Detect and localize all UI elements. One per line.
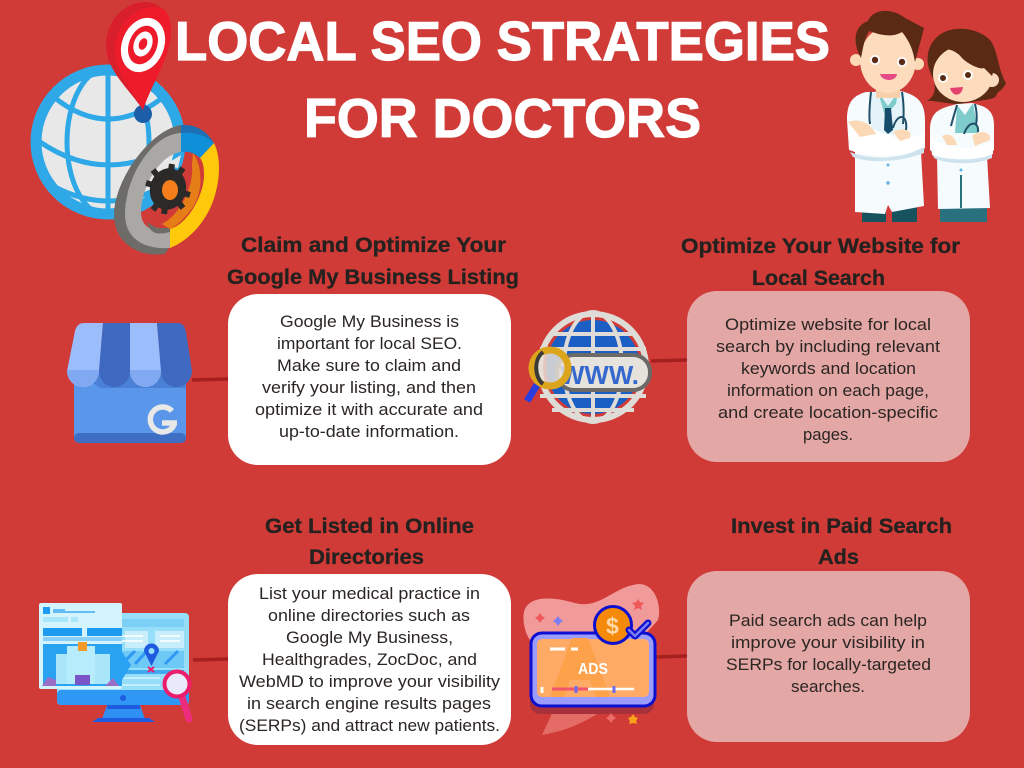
title: LOCAL SEO STRATEGIES — [175, 10, 830, 72]
heading: optimize website: Optimize Your Website for — [681, 235, 960, 258]
panel: claim and optimize — [228, 294, 511, 465]
panel: optimize website: and create location-specific — [718, 404, 938, 422]
panel: claim and optimize: verify your listing, and then — [262, 379, 476, 397]
panel: paid search ads: improve your visibility in — [731, 634, 925, 652]
icon: ads phone with coin — [523, 584, 659, 735]
panel: paid search ads: SERPs for locally-targeted — [726, 656, 931, 674]
panel: optimize website: information on each page, — [727, 382, 929, 400]
panel: optimize website: search by including relevant — [716, 338, 940, 356]
icon: directory listing on monitor — [39, 603, 190, 722]
panel: paid search ads: Paid search ads can help — [729, 612, 927, 630]
icon: globe with location pin and gear ring — [36, 2, 219, 255]
panel: online directories: (SERPs) and attract new patients. — [239, 717, 500, 735]
icon: google my business store — [67, 323, 192, 443]
icon: ads phone with coin: ADS — [578, 661, 608, 678]
panel: claim and optimize: important for local SEO. — [277, 335, 462, 353]
heading: online directories: Directories — [309, 546, 424, 569]
panel: optimize website — [687, 291, 970, 462]
title — [175, 10, 830, 149]
heading: paid search ads: Invest in Paid Search — [731, 515, 952, 538]
heading: online directories: Get Listed in Online — [265, 515, 474, 538]
panel: claim and optimize: Google My Business is — [280, 313, 459, 331]
heading: claim and optimize — [227, 234, 519, 289]
panel: online directories: List your medical practice in — [259, 585, 480, 603]
panel: online directories — [228, 574, 511, 745]
panel: claim and optimize: up-to-date information. — [279, 423, 459, 441]
icon: doctors — [847, 11, 1006, 222]
panel: online directories: online directories such as — [268, 607, 470, 625]
heading: paid search ads — [731, 515, 952, 569]
panel: claim and optimize: Make sure to claim and — [277, 357, 461, 375]
panel: online directories: Healthgrades, ZocDoc, and — [262, 651, 477, 669]
icon: www globe with magnifier — [527, 312, 650, 422]
heading: paid search ads: Ads — [818, 546, 859, 569]
connector lines — [192, 360, 687, 660]
heading: claim and optimize: Claim and Optimize Your — [241, 234, 506, 257]
icon: www globe with magnifier: WWW. — [560, 360, 639, 390]
heading: optimize website — [681, 235, 960, 290]
panel: paid search ads: searches. — [791, 678, 865, 696]
heading: optimize website: Local Search — [752, 267, 885, 290]
icon: ads phone with coin: $ — [606, 613, 619, 639]
panel: optimize website: Optimize website for local — [725, 316, 931, 334]
heading: claim and optimize: Google My Business Listing — [227, 266, 519, 289]
panel: online directories: in search engine results pages — [247, 695, 491, 713]
panel: online directories: Google My Business, — [286, 629, 453, 647]
woman doctor — [927, 29, 1006, 222]
panel: claim and optimize: optimize it with accurate and — [255, 401, 483, 419]
panel: online directories: WebMD to improve your visibility — [239, 673, 501, 691]
panel: optimize website: keywords and location — [741, 360, 916, 378]
panel: paid search ads — [687, 571, 970, 742]
panel: optimize website: pages. — [803, 426, 853, 444]
heading: online directories — [265, 515, 474, 569]
man doctor — [847, 11, 925, 222]
title: FOR DOCTORS — [304, 87, 701, 149]
